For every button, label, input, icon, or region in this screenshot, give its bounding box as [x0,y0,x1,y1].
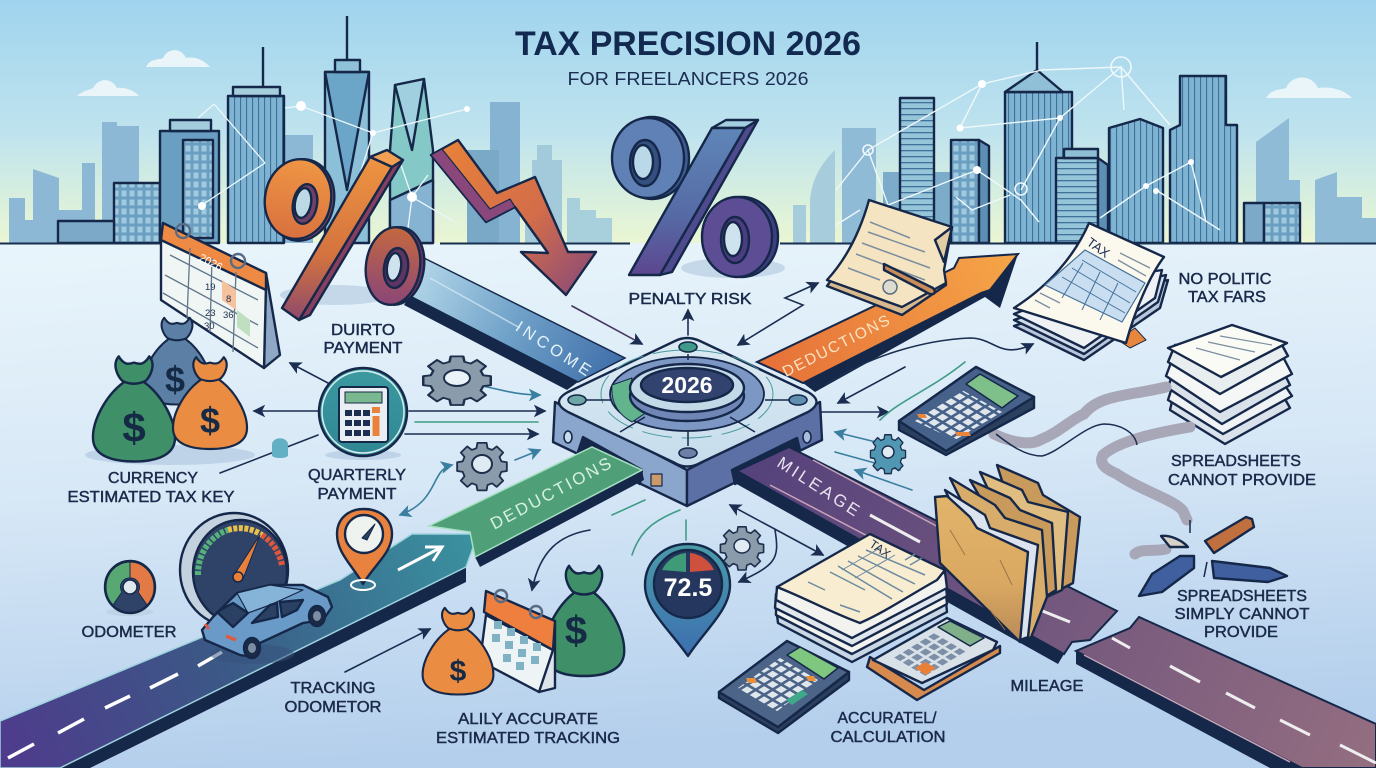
subtitle: FOR FREELANCERS 2026 [568,69,808,89]
central roof tower [1005,42,1072,243]
icon: desk calculator [899,367,1034,455]
icon: gear right [870,435,906,474]
icon: wall calendar [161,223,280,368]
icon: small odometer [105,561,155,616]
icon: speedometer [180,513,288,627]
pin value: 72.5 [664,574,712,602]
striped tower [228,47,284,243]
label: spreadsheets simply cannot provide: SIMPLY CANNOT [1174,606,1310,623]
calendar dates: 19 [205,282,216,293]
label: spreadsheets simply cannot provide: PROVIDE [1204,624,1278,641]
label: mileage: MILEAGE [1010,678,1084,695]
document header: TAX [1084,234,1113,261]
road: income [404,257,625,390]
icon: calendar bottom [480,590,555,692]
icon: money bags: $ [122,404,146,451]
label: tracking odometor: ODOMETOR [284,699,382,716]
label: no politic tax fars: TAX FARS [1188,289,1266,306]
icon: folders [935,465,1080,642]
road label: deductions: DEDUCTIONS [487,454,614,533]
hub chip [651,474,662,486]
icon: dark calculator [719,641,849,733]
road edge stripes [770,460,1290,762]
road dashes [8,652,222,758]
tall window tower [160,120,219,243]
horizon line [0,242,1376,244]
icon: paper stack [1166,325,1292,444]
hub year: 2026 [661,372,713,398]
icon: tax document stack [1014,223,1168,360]
label: currency estimated tax key: ESTIMATED TAX KEY [68,489,234,506]
icon: central hub 2026 [553,338,822,506]
icon: gear left [457,443,507,490]
label: accurate calculation: ACCURATEL/ [838,710,937,727]
icon: car [202,585,332,664]
calendar dates: 23 [205,308,216,319]
icon: orange location pin [337,509,392,590]
icon: money bags: $ [200,400,220,441]
calendar dates: 30 [204,321,215,332]
teal connector arrows [400,362,965,555]
road label: income: INCOME [512,318,594,380]
calendar header text: 2026 [197,252,224,274]
icon: gear bottom [720,527,764,570]
blue pen piece left [1139,556,1194,596]
road: mileage [733,447,1376,768]
label: spreadsheets simply cannot provide: SPREADSHEETS [1177,588,1307,605]
icon: green money bag bottom [544,566,624,676]
icon: tax document stack lower [775,534,947,662]
thin route line [996,424,1137,456]
arrow label: deductions: DEDUCTIONS [780,312,893,381]
road label: mileage: MILEAGE [774,453,863,520]
glass tower [390,79,433,243]
striped pair [1109,119,1163,243]
network lines right [836,67,1220,230]
icon: money bags: $ [165,359,185,400]
pale far buildings [793,118,1376,243]
arrow: orange deductions [757,254,1018,392]
label: alily accurate estimated tracking: ALILY ACCURATE [458,711,598,728]
label: no politic tax fars: NO POLITIC [1178,271,1272,288]
city skyline: left [9,16,612,243]
label: duirto payment: PAYMENT [324,340,403,357]
icon: calculator on book [867,618,1000,700]
ground background [0,243,1376,768]
percent sign: blue purple [612,117,785,278]
icon: green money bag bottom: $ [565,609,587,653]
window building [951,140,989,243]
calendar dates: 36 [223,310,234,321]
hub slot left [578,437,642,484]
label: accurate calculation: CALCULATION [830,729,946,746]
label: odometer: ODOMETER [82,624,176,641]
grey broken path [994,387,1190,554]
spire tower [325,16,369,243]
label: penalty risk: PENALTY RISK [628,291,752,308]
low window block [1244,203,1300,243]
document header: TAX [867,537,893,561]
green bag [93,356,175,462]
percent sign: orange [259,150,429,320]
network lines left [198,104,467,228]
label: quarterly payment: PAYMENT [318,486,397,503]
road: deductions [429,447,644,567]
city skyline: right [793,42,1376,243]
blue bag [143,318,211,404]
arrow: falling zigzag [431,140,596,295]
icon: calculator badge [319,368,407,460]
calendar dates: 8 [226,294,231,305]
stepped tower [1170,76,1237,243]
icon: map pin 72.5 [645,544,730,656]
title: TAX PRECISION 2026 [515,25,861,63]
connector arrows from calculator [220,283,1033,672]
label: quarterly payment: QUARTERLY [308,467,406,484]
road: tracking route [0,534,478,768]
road dashes [870,515,1376,763]
label: duirto payment: DUIRTO [331,322,395,339]
clouds left [77,50,210,96]
icon: gear top [423,356,491,405]
building with windows [114,183,160,243]
orange bag [173,357,247,449]
icon: broken pen [1139,517,1287,596]
blue pen piece right [1212,561,1287,582]
label: alily accurate estimated tracking: ESTIMATED TRACKING [436,730,620,747]
route arrow [398,547,442,570]
cloud right [1266,78,1352,98]
icon: cream document with pen [827,200,952,315]
sky background [0,0,1376,244]
icon: lock tag [272,438,288,458]
label: spreadsheets cannot provide: CANNOT PROVIDE [1168,472,1316,489]
label: spreadsheets cannot provide: SPREADSHEETS [1171,453,1301,470]
icon: orange money bag bottom [423,608,493,694]
orange pen piece [1205,517,1254,553]
label: tracking odometor: TRACKING [290,680,376,697]
label: currency estimated tax key: CURRENCY [108,470,198,487]
icon: orange money bag bottom: $ [450,655,467,688]
striped building [900,98,934,243]
icon: money bags [85,318,255,465]
low striped block [1056,149,1108,243]
hub slot right [732,438,800,484]
pale far buildings [9,102,612,243]
